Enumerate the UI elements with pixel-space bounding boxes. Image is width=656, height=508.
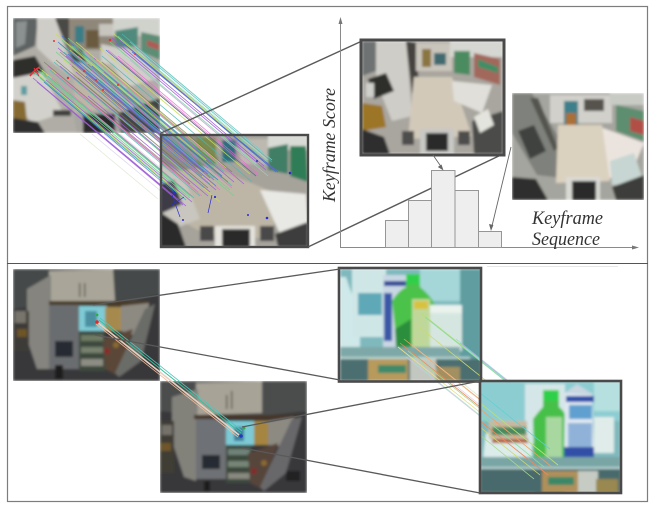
label: y axis: Keyframe Score xyxy=(319,88,339,203)
label: x axis line two: Sequence xyxy=(532,230,600,250)
histogram bars xyxy=(386,170,502,248)
match lines inside close-up xyxy=(398,313,563,461)
image: kitchen keyframe B xyxy=(160,134,308,247)
image: fridge close-up C xyxy=(338,266,508,416)
image: fridge close-up D xyxy=(480,381,621,495)
image border: kitchen keyframe B outline xyxy=(161,135,308,247)
image: fridge view B xyxy=(160,381,307,493)
axes xyxy=(340,22,636,248)
label: x axis line one: Keyframe xyxy=(531,209,603,229)
panel: top keyframe scoring xyxy=(13,17,644,250)
keypoints: fridge markers xyxy=(95,314,245,438)
match lines: fridge object correspondences xyxy=(96,318,242,437)
zoom lines: view B to D xyxy=(242,381,480,493)
zoom lines: B to score image xyxy=(160,41,503,247)
keypoints: red and blue feature markers xyxy=(30,39,291,221)
panel: bottom object matching xyxy=(13,268,621,495)
image: lowest score keyframe xyxy=(512,93,644,200)
image: kitchen keyframe A xyxy=(13,18,160,133)
image: fridge view A xyxy=(13,269,160,381)
zoom lines: view A to C xyxy=(93,269,340,380)
match lines continued inside D xyxy=(480,393,558,479)
arrow: to highest bar xyxy=(433,155,444,170)
chart: keyframe score axes and bars xyxy=(338,17,639,250)
axis arrowheads xyxy=(338,17,639,250)
match lines: kitchen feature correspondences xyxy=(33,34,278,206)
image: highest score keyframe xyxy=(361,40,504,155)
arrow: to lowest bar xyxy=(489,147,511,231)
